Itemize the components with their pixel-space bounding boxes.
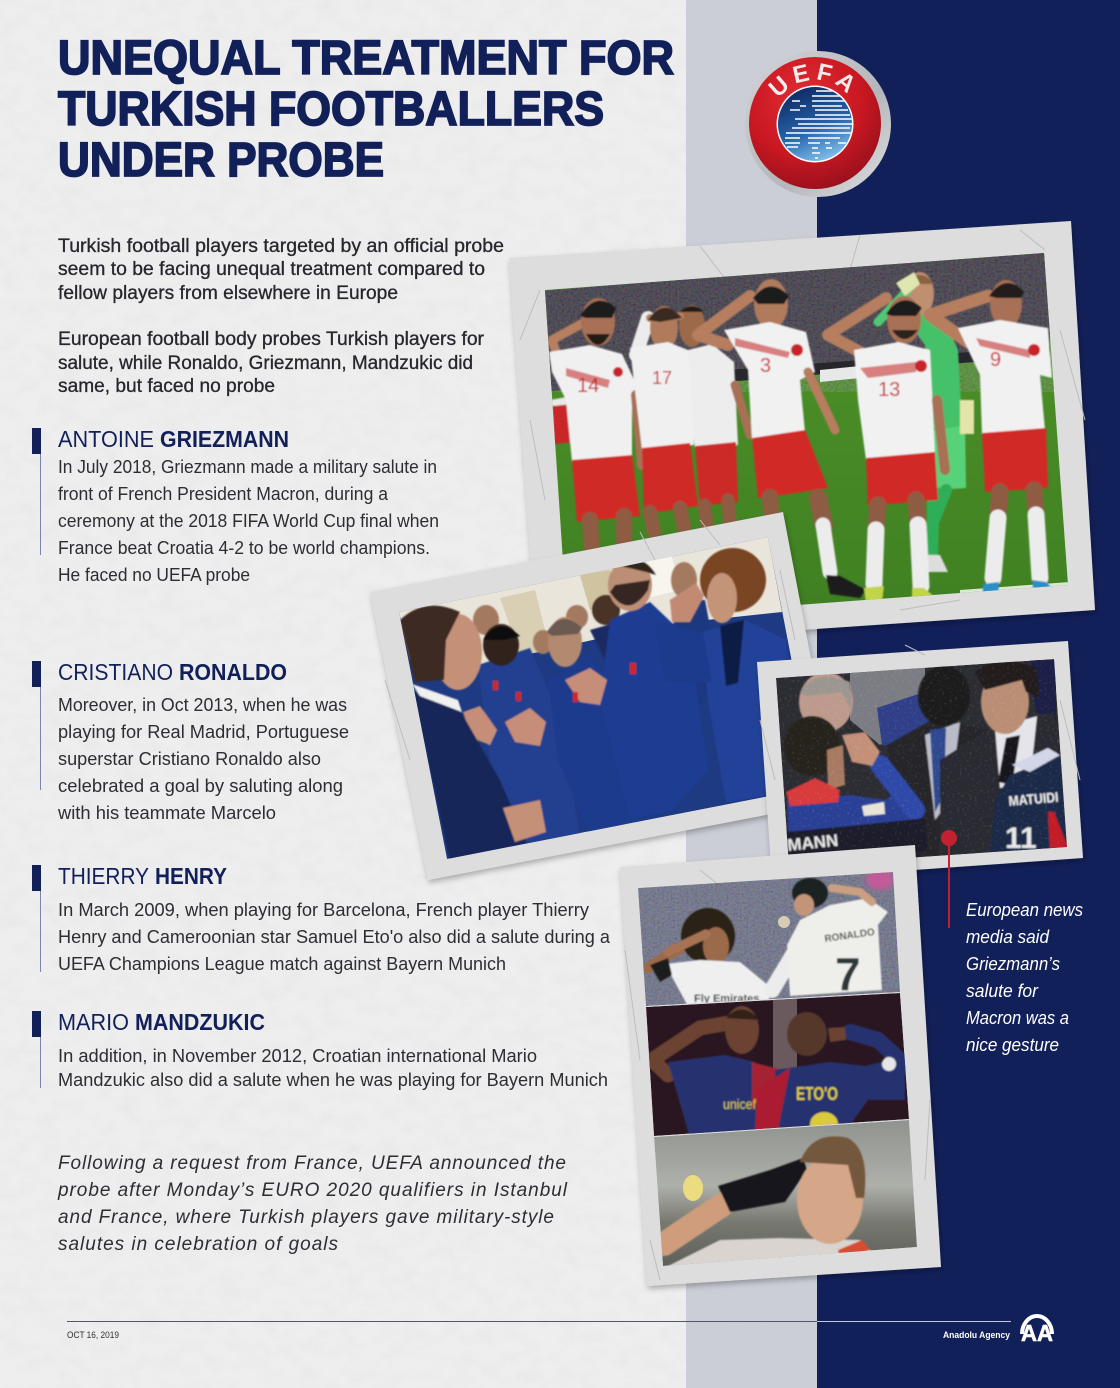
medals: [493, 663, 636, 702]
section: Mandzukic: [32, 1009, 608, 1090]
section: Griezmann: ANTOINE: [58, 426, 154, 452]
title: [58, 32, 674, 187]
photo frame: Turkish players saluting: [509, 221, 1095, 648]
footer: Anadolu Agency: [943, 1330, 1011, 1341]
UEFA logo: UEFA: [768, 63, 853, 95]
player 13: 13: [878, 379, 900, 401]
italic closing note: Following a request from France, UEFA announced the: [58, 1153, 566, 1174]
photo frame: World Cup final in the rain: [757, 641, 1083, 880]
photo: Griezmann salute: [399, 537, 816, 862]
Matuidi: [990, 748, 1068, 855]
intro text: salute, while Ronaldo, Griezmann, Mandzukic did: [58, 353, 473, 374]
intro text: same, but faced no probe: [58, 376, 275, 397]
section: Ronaldo: with his teammate Marcelo: [57, 803, 276, 823]
player 21: [679, 305, 750, 530]
photo: Henry and Eto'o: [646, 993, 909, 1138]
footer: OCT 16, 2019: [67, 1330, 119, 1340]
player 17: [630, 306, 698, 532]
Marcelo: Fly Emirates: [694, 993, 759, 1005]
icon: Anadolu Agency logo: AA: [1021, 1320, 1053, 1346]
Eto'o: [755, 1012, 905, 1136]
Ronaldo: RONALDO: [824, 927, 876, 945]
background heads: [473, 562, 697, 654]
callout text: media said: [966, 927, 1050, 947]
photo frame: Ronaldo, Henry, Mandzukic salutes: [620, 845, 941, 1286]
callout text: Macron was a: [966, 1008, 1069, 1028]
footer: [67, 1316, 1053, 1346]
section: Henry: Henry and Cameroonian star Samuel Eto'o also did a salute during a: [58, 927, 611, 947]
Matuidi: 11: [1005, 822, 1037, 855]
photo: Marcelo and Ronaldo: [636, 870, 901, 1010]
section: Griezmann: [32, 426, 439, 585]
player 13: [828, 296, 945, 604]
section: Ronaldo: celebrated a goal by saluting along: [58, 776, 343, 796]
title: TURKISH FOOTBALLERS: [58, 83, 604, 136]
intro text: [58, 236, 504, 397]
photo: Turkish players: [540, 250, 1070, 625]
player 3: 3: [760, 355, 771, 377]
section: Ronaldo: RONALDO: [179, 659, 287, 685]
player 9: 9: [990, 349, 1001, 371]
Marcelo: [648, 908, 770, 1010]
section: Mandzukic: MARIO: [58, 1009, 129, 1035]
photo: Macron and Griezmann: [776, 659, 1067, 858]
player 9: [930, 280, 1054, 596]
intro text: seem to be facing unequal treatment compared to: [58, 259, 485, 280]
section: Griezmann: In July 2018, Griezmann made a military salute in: [58, 457, 437, 477]
callout marker: [941, 830, 957, 928]
intro text: Turkish football players targeted by an official probe: [58, 236, 504, 257]
photo frame: Griezmann with Macron: [370, 512, 838, 880]
section: Griezmann: He faced no UEFA probe: [58, 565, 250, 585]
section: Ronaldo: Moreover, in Oct 2013, when he was: [58, 695, 347, 715]
Griezmann: [669, 547, 788, 802]
italic closing note: probe after Monday’s EURO 2020 qualifiers in Istanbul: [57, 1180, 568, 1201]
section: Griezmann: front of French President Macron, during a: [58, 484, 389, 504]
Henry: [652, 1006, 782, 1138]
Nabil: [547, 617, 640, 835]
Matuidi: MATUIDI: [1008, 789, 1059, 809]
Griezmann: MANN: [786, 831, 839, 855]
Eto'o: ETO'O: [796, 1084, 838, 1104]
Putin: [799, 672, 853, 732]
title: UNDER PROBE: [58, 134, 384, 187]
section: Mandzukic: Mandzukic also did a salute when he was playing for Bayern Munich: [58, 1070, 608, 1090]
section: Griezmann: France beat Croatia 4-2 to be world champions.: [58, 538, 430, 558]
italic closing note: salutes in celebration of goals: [58, 1234, 338, 1255]
callout text: salute for: [966, 981, 1039, 1001]
section: Mandzukic: In addition, in November 2012, Croatian international Mario: [58, 1046, 537, 1066]
section: Henry: UEFA Champions League match against Bayern Munich: [58, 954, 506, 974]
intro text: European football body probes Turkish players for: [58, 329, 485, 350]
callout text: European news: [966, 900, 1083, 920]
Macron: [400, 606, 546, 862]
callout text: nice gesture: [966, 1035, 1059, 1055]
player 14: [549, 298, 642, 550]
hands clapping: [462, 667, 608, 747]
section: Henry: In March 2009, when playing for Barcelona, French player Thierry: [58, 900, 589, 920]
goalkeeper: [878, 272, 974, 572]
title: UNEQUAL TREATMENT FOR: [58, 32, 674, 85]
section: Ronaldo: playing for Real Madrid, Portuguese: [58, 722, 349, 742]
section: Henry: THIERRY: [58, 863, 149, 889]
section: Henry: HENRY: [155, 863, 227, 889]
italic closing note: and France, where Turkish players gave military-style: [58, 1207, 554, 1228]
callout text: [966, 900, 1083, 1055]
UEFA logo: [745, 51, 891, 197]
italic closing note: [57, 1153, 568, 1255]
Macron: [940, 661, 1067, 860]
section: Ronaldo: superstar Cristiano Ronaldo also: [58, 749, 321, 769]
photo: Mandzukic: [654, 1120, 917, 1270]
centre official: [887, 666, 990, 860]
section: Mandzukic: MANDZUKIC: [135, 1009, 265, 1035]
far-left player: [552, 396, 568, 442]
player 14: 14: [577, 375, 599, 397]
Ronaldo: [772, 878, 888, 1000]
Ronaldo: 7: [835, 948, 861, 1000]
Giroud: [600, 559, 708, 818]
Dembele: [478, 624, 580, 850]
player 17: 17: [652, 368, 672, 388]
section: Henry: [32, 863, 611, 974]
section: Griezmann: ceremony at the 2018 FIFA World Cup final when: [58, 511, 439, 531]
player 3: [698, 279, 866, 598]
Henry: unicef: [723, 1096, 756, 1112]
section: Ronaldo: [32, 659, 349, 823]
callout text: Griezmann’s: [966, 954, 1060, 974]
section: Ronaldo: CRISTIANO: [58, 659, 173, 685]
Griezmann: [784, 716, 928, 870]
section: Griezmann: GRIEZMANN: [160, 426, 289, 452]
intro text: fellow players from elsewhere in Europe: [58, 283, 398, 304]
